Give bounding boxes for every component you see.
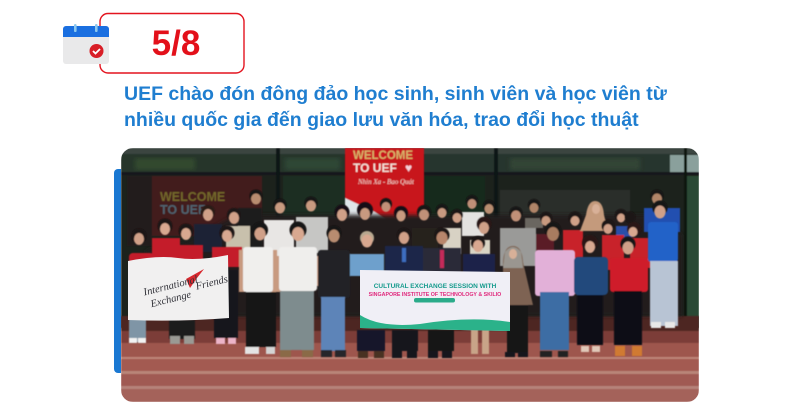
photo: crowd backdrop: [146, 215, 682, 316]
photo: front row of delegates: [129, 200, 678, 358]
title text: UEF chào đón đông đảo học sinh, sinh viên và học viên từ: [124, 83, 667, 105]
photo: white banner International Exchange Friends: Friends: [194, 274, 229, 293]
icon: calendar: [63, 24, 109, 64]
photo: building facade: [121, 148, 699, 328]
page artwork: [63, 12, 699, 402]
photo: cultural exchange session banner: CULTURAL EXCHANGE SESSION WITH: [374, 283, 497, 290]
photo: red welcome banner: TO UEF: [353, 161, 397, 175]
photo: cultural exchange session banner: [360, 270, 510, 331]
date badge: [100, 14, 244, 73]
date badge: 5/8: [152, 24, 200, 63]
photo: white banner International Exchange Friends: International: [142, 274, 199, 299]
blue accent bar: [114, 169, 121, 373]
photo: red welcome banner: ♥: [405, 161, 412, 175]
title text: nhiều quốc gia đến giao lưu văn hóa, trao đổi học thuật: [124, 109, 639, 131]
photo: back row of students: [194, 190, 680, 270]
photo: cultural exchange session banner: SINGAPORE INSTITUTE OF TECHNOLOGY & SKILIO: [369, 292, 501, 298]
photo: red welcome banner: [345, 148, 424, 228]
photo: red welcome banner: Nhìn Xa - Bao Quát: [357, 178, 415, 186]
photo: red granite steps: [121, 316, 699, 402]
title text: [124, 83, 667, 131]
photo: white banner International Exchange Friends: [128, 255, 230, 321]
photo: red welcome banner: WELCOME: [353, 150, 413, 162]
photo: dim welcome poster: [151, 176, 262, 236]
photo: delegates group on the steps: [121, 148, 699, 402]
photo: white banner International Exchange Friends: Exchange: [149, 289, 193, 310]
photo: dim welcome poster: WELCOME: [160, 190, 225, 204]
photo: dim welcome poster: TO UEF: [160, 203, 206, 217]
